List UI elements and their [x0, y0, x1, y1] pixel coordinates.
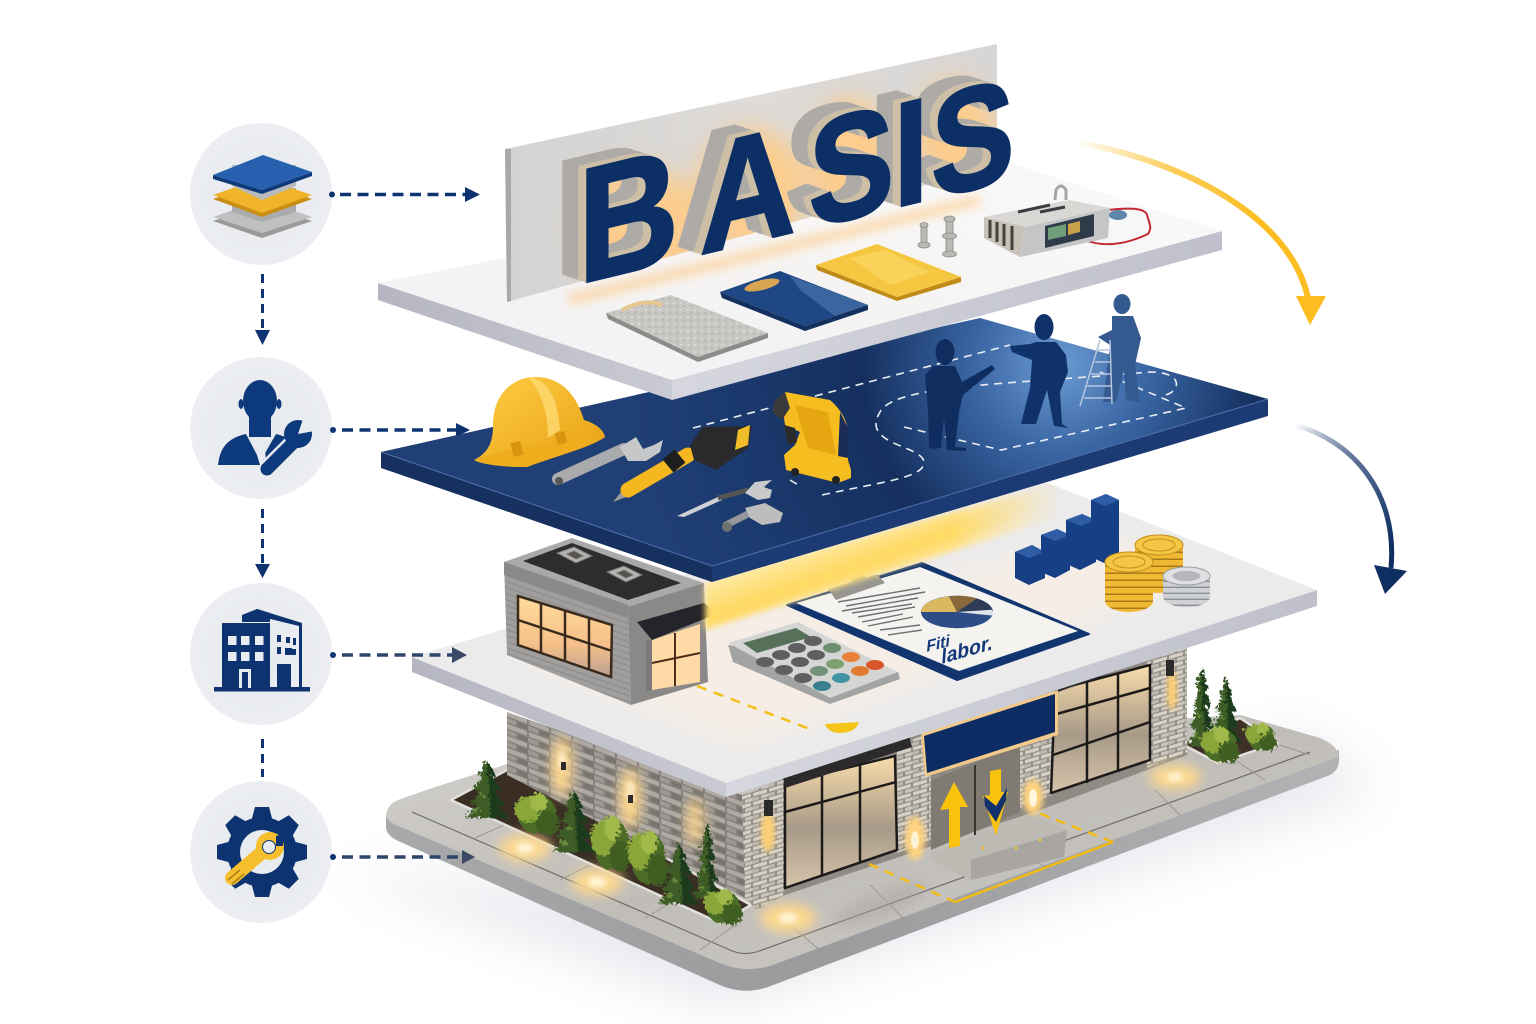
curved arrow: yellow: [1075, 142, 1326, 325]
BASIS letters: [578, 31, 1015, 319]
control device: [984, 186, 1127, 257]
sign backlight: [608, 67, 997, 260]
side icon: building: [190, 583, 332, 725]
roof path marker: [697, 686, 859, 733]
connector: technician down to building: [255, 509, 270, 578]
ground floor: front wall: [742, 640, 1187, 898]
entrance door divider: [974, 765, 976, 835]
small building awning: [637, 603, 719, 640]
clipboard caption: labor.: [941, 631, 994, 669]
brick pilaster: left corner: [742, 778, 785, 910]
BASIS letters: S: [809, 72, 894, 260]
clipboard caption: Fiti: [926, 631, 951, 656]
shrubs left: [463, 758, 740, 923]
bolts: [918, 216, 956, 257]
wall lights: [551, 660, 1177, 860]
arrow up: [940, 782, 968, 848]
BASIS letters: S: [931, 47, 1015, 231]
blue plate: [381, 318, 1268, 582]
calculator: [728, 622, 900, 704]
sample tile gray: [606, 295, 768, 362]
connector: building to roof plate: [330, 647, 467, 663]
storefront sign: [921, 690, 1058, 777]
side icon: layers: [190, 123, 332, 265]
sign backplate: [505, 44, 997, 302]
planter right: [1184, 718, 1277, 763]
ground floor: left brick wall: [507, 712, 745, 898]
rooftop vents: [557, 547, 642, 582]
entry step: [931, 813, 1067, 880]
ground lights: [499, 765, 1201, 932]
floor plan dashes: [693, 345, 1186, 495]
roof plate: [412, 480, 1317, 797]
clipboard: [787, 563, 1089, 680]
connector: building down to gear: [261, 739, 264, 777]
connector: layers down to technician: [255, 274, 270, 345]
clipboard clip: [828, 568, 885, 600]
entry guide lines: [869, 812, 1113, 902]
storefront window right: [1051, 645, 1160, 793]
worker silhouette 3: [1098, 294, 1141, 402]
brick pilaster: right: [1147, 645, 1187, 768]
base shadow: [330, 730, 1380, 1010]
small wrench: [677, 480, 772, 517]
brick pilaster: center left: [897, 733, 931, 853]
report lines: [838, 588, 925, 635]
ladder: [1080, 340, 1112, 406]
infographic: BASIS layered building diagram: [190, 44, 1407, 1012]
hard hat: [474, 377, 605, 467]
coin stacks: [1105, 535, 1210, 612]
sample tile yellow: [816, 244, 961, 301]
screwdriver: [613, 425, 752, 502]
small building windows: [518, 596, 612, 677]
BASIS letters: A: [700, 91, 796, 287]
brick pilaster: center right: [1020, 693, 1052, 808]
worker silhouette 2: [1010, 314, 1068, 428]
BASIS letters: I: [893, 66, 929, 240]
wrench: [555, 437, 663, 485]
bar chart: [1015, 494, 1119, 585]
pie chart: [921, 596, 993, 628]
connector: layers to sign: [329, 187, 480, 202]
top plate: [378, 160, 1222, 400]
clamp tool: [722, 503, 783, 532]
planter left: [451, 770, 751, 923]
light band under blue plate: [705, 478, 1075, 630]
top plate light reflection: [567, 195, 981, 305]
storefront window left: [782, 735, 912, 888]
small building door: [646, 624, 700, 692]
small building: [504, 538, 719, 705]
drill: [772, 392, 851, 484]
sample tile blue: [720, 271, 868, 331]
connector: gear to sidewalk: [330, 850, 475, 864]
entrance door: [931, 745, 1020, 850]
curved arrow: navy: [1295, 425, 1407, 594]
arrow down: [983, 769, 1008, 836]
side icon: gear with wrench: [190, 781, 332, 923]
connector: technician to service plate: [330, 423, 470, 437]
shrubs right: [1186, 664, 1275, 761]
red cable: [1085, 209, 1150, 244]
worker silhouette 1: [925, 339, 995, 451]
base sidewalk: [386, 715, 1339, 991]
BASIS letters: B: [578, 112, 679, 319]
side icon: technician with wrench: [190, 357, 332, 499]
